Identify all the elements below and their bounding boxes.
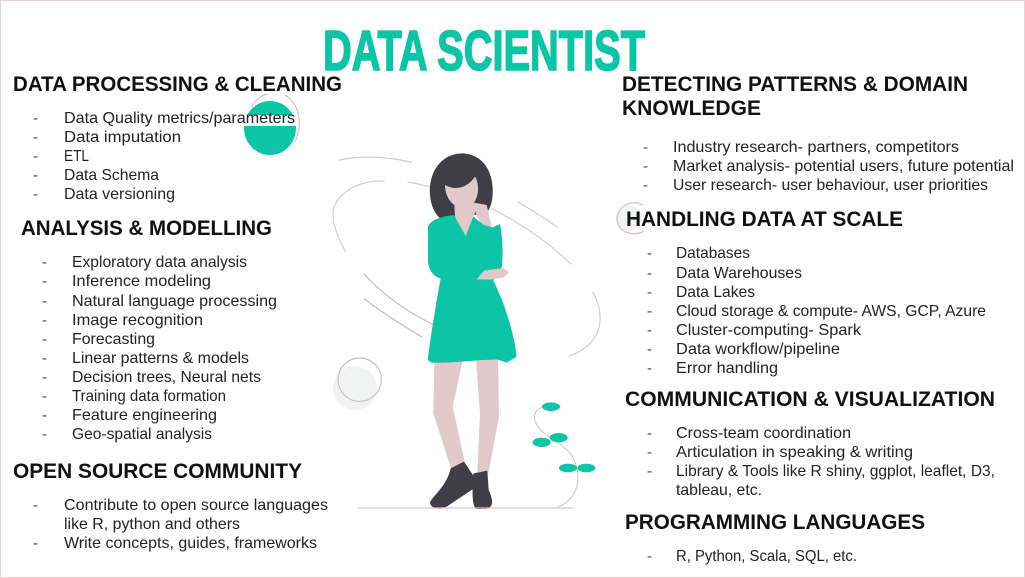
list: Articulation in speaking & writing [676, 444, 913, 461]
list: Write concepts, guides, frameworks [64, 535, 317, 552]
list: - [647, 303, 652, 320]
list: - [33, 148, 38, 165]
icon: small circle behind handling data heading [616, 203, 644, 234]
heading: HANDLING DATA AT SCALE [626, 208, 903, 231]
list: - [647, 425, 652, 442]
list: ETL [64, 148, 89, 165]
list: Industry research- partners, competitors [673, 139, 959, 156]
list: Training data formation [72, 388, 226, 405]
list: - [42, 273, 47, 290]
list: - [33, 186, 38, 203]
list: Data Schema [64, 167, 159, 184]
icon: teal circle behind first list [240, 94, 299, 155]
title: DATA SCIENTIST [323, 19, 645, 83]
list: Data Lakes [676, 284, 755, 301]
list [647, 245, 986, 377]
list: Error handling [676, 360, 778, 377]
list: Market analysis- potential users, future potential [673, 158, 1014, 175]
list: Linear patterns & models [72, 350, 249, 367]
ground line [357, 506, 573, 510]
panel: detecting patterns and domain knowledge [622, 73, 1014, 194]
hand and arm [477, 268, 509, 280]
list: - [647, 341, 652, 358]
list: Cluster-computing- Spark [676, 322, 862, 339]
list: - [42, 293, 47, 310]
legs [433, 360, 465, 470]
list: Cloud storage & compute- AWS, GCP, Azure [676, 303, 986, 320]
panel: analysis and modelling [21, 217, 277, 443]
list: - [647, 360, 652, 377]
plant [533, 402, 595, 508]
list: - [643, 158, 648, 175]
list: Data Quality metrics/parameters [64, 110, 295, 127]
list: Library & Tools like R shiny, ggplot, leaflet, D3, [676, 463, 995, 480]
list [643, 139, 1014, 194]
heading [622, 73, 968, 120]
list: - [647, 463, 652, 480]
list: Data workflow/pipeline [676, 341, 840, 358]
list: - [647, 444, 652, 461]
list: Cross-team coordination [676, 425, 851, 442]
list: - [42, 312, 47, 329]
list: - [33, 535, 38, 552]
heading: COMMUNICATION & VISUALIZATION [625, 388, 995, 411]
list: Data Warehouses [676, 265, 802, 282]
list: Feature engineering [72, 407, 217, 424]
list: - [33, 110, 38, 127]
list: - [42, 407, 47, 424]
list [647, 425, 995, 499]
hair [430, 153, 493, 219]
list: Decision trees, Neural nets [72, 369, 261, 386]
heading: DETECTING PATTERNS & DOMAIN [622, 73, 968, 96]
list: - [643, 139, 648, 156]
orbit lines [333, 157, 600, 356]
list: - [42, 388, 47, 405]
list: Exploratory data analysis [72, 254, 247, 271]
list [33, 110, 295, 203]
heading: ANALYSIS & MODELLING [21, 217, 272, 240]
list: like R, python and others [64, 516, 240, 533]
dress [428, 215, 517, 363]
list: - [33, 167, 38, 184]
list: - [42, 426, 47, 443]
list: User research- user behaviour, user priorities [673, 177, 988, 194]
circle with shadow [333, 358, 381, 410]
list: Contribute to open source languages [64, 497, 328, 514]
list: - [643, 177, 648, 194]
list: Image recognition [72, 312, 203, 329]
heading: KNOWLEDGE [622, 97, 761, 120]
list: R, Python, Scala, SQL, etc. [676, 548, 857, 565]
shoes [430, 462, 474, 509]
panel: data processing and cleaning [13, 73, 342, 203]
list: - [647, 322, 652, 339]
list: Forecasting [72, 331, 155, 348]
heading: OPEN SOURCE COMMUNITY [13, 460, 302, 483]
list: Inference modeling [72, 273, 211, 290]
panel: communication and visualization [625, 388, 995, 499]
list: - [647, 284, 652, 301]
heading: DATA PROCESSING & CLEANING [13, 73, 342, 96]
illustration: thinking woman [333, 153, 600, 509]
list: tableau, etc. [676, 482, 762, 499]
list: - [33, 129, 38, 146]
panel: handling data at scale [626, 208, 986, 377]
list: - [42, 331, 47, 348]
list: - [647, 245, 652, 262]
list: Geo-spatial analysis [72, 426, 212, 443]
list: Databases [676, 245, 750, 262]
list: - [647, 548, 652, 565]
panel: programming languages [625, 511, 925, 565]
list: - [42, 254, 47, 271]
heading: PROGRAMMING LANGUAGES [625, 511, 925, 534]
list [33, 497, 328, 552]
face and neck [445, 177, 492, 236]
list: - [33, 497, 38, 514]
list: Natural language processing [72, 293, 277, 310]
list: - [42, 350, 47, 367]
list: - [647, 265, 652, 282]
list: Data versioning [64, 186, 175, 203]
list: Data imputation [64, 129, 181, 146]
panel: open source community [13, 460, 328, 552]
list [42, 254, 277, 443]
list: - [42, 369, 47, 386]
